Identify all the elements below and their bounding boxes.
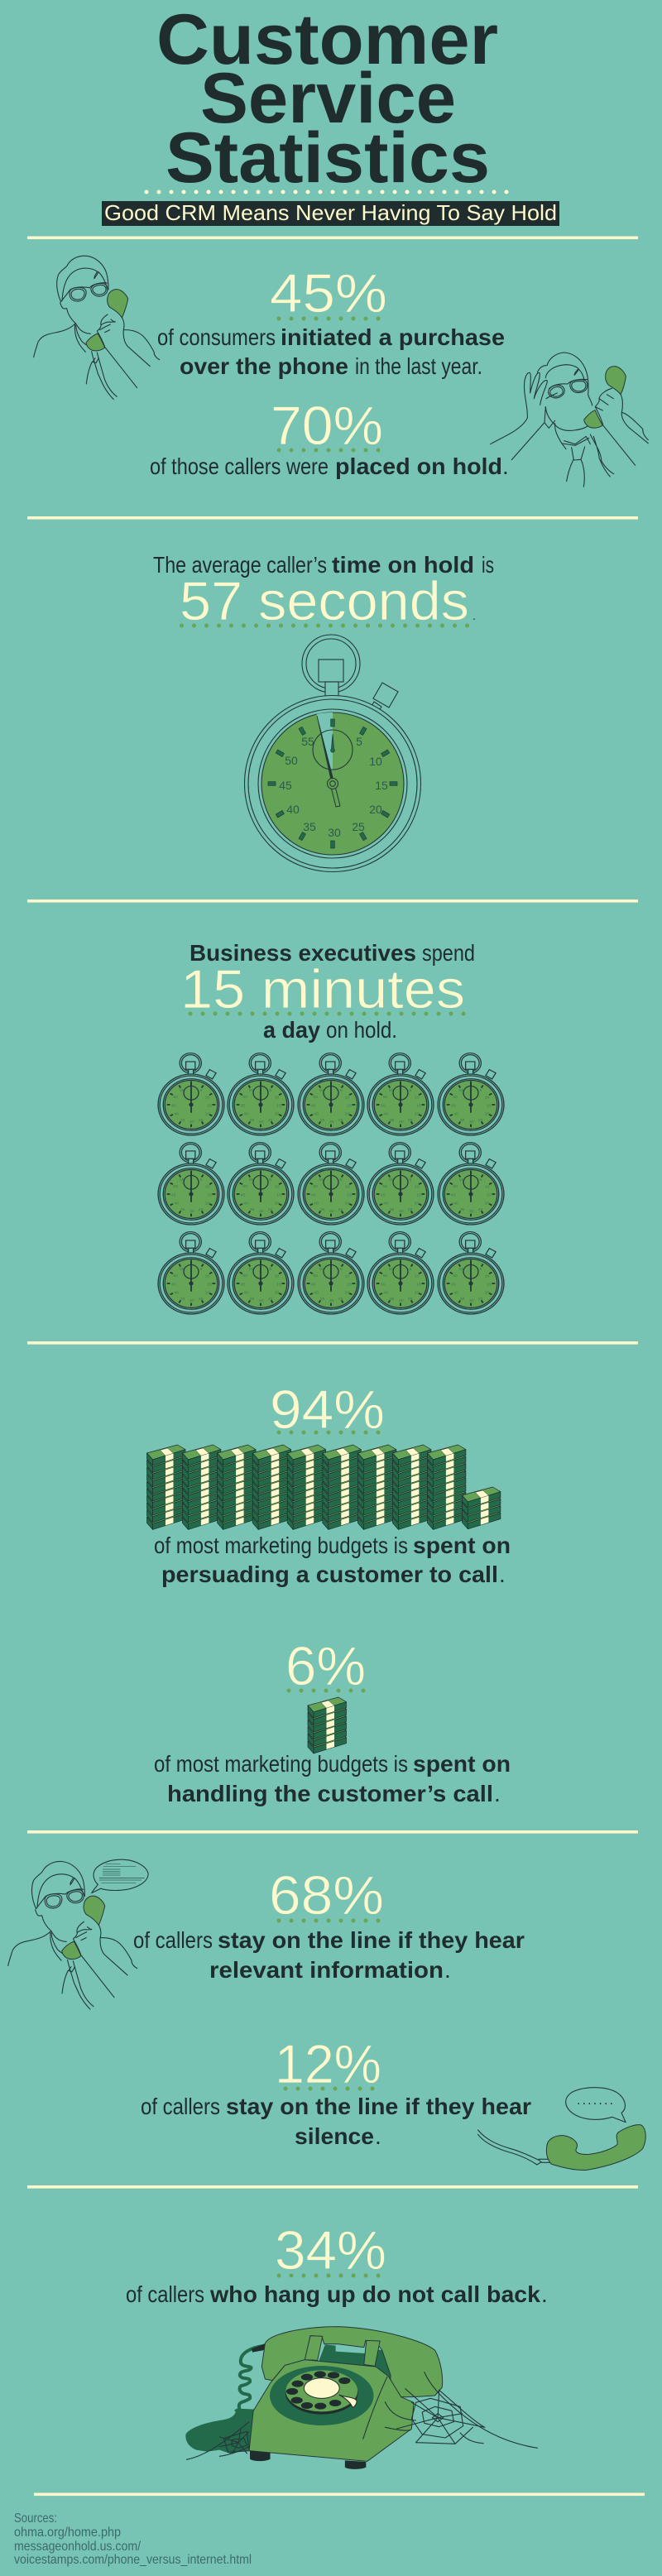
text: spent on handling (154, 1751, 511, 1806)
text: spent on handling: . (494, 1781, 501, 1806)
text: who hang up: who hang up do not call back (209, 2281, 540, 2307)
text: initiated a purchase: over the phone (180, 353, 348, 379)
text: initiated a purchase: in the last year. (355, 353, 482, 379)
text: silence: . (375, 2123, 381, 2149)
text: placed on hold: of those callers were (150, 453, 329, 479)
handset (261, 2327, 443, 2397)
stat: 57 seconds: 57 seconds (180, 570, 469, 631)
text: silence: silence (295, 2123, 374, 2149)
dial numbers: 50 (285, 754, 298, 767)
panel: marketing budgets (147, 1379, 511, 1806)
text: relevant information: . (444, 1957, 451, 1983)
text: who hang up: . (541, 2281, 548, 2307)
text: who hang up: of callers (126, 2281, 204, 2307)
stat: 70%: 70% (271, 395, 383, 456)
dial numbers: 5 (356, 735, 362, 748)
text: average caller's time on hold (153, 552, 494, 578)
dial numbers: 55 (301, 735, 314, 748)
dial numbers: 10 (369, 755, 382, 768)
text: relevant information (133, 1927, 525, 1983)
text: business executives spend: Business executives (189, 940, 416, 966)
text: spent on persuading: persuading a customer to call (161, 1561, 498, 1587)
sources: ohma.org/home.php (14, 2526, 121, 2540)
dial numbers: 45 (279, 779, 292, 792)
dial numbers: 35 (303, 820, 316, 833)
cobweb right (385, 2372, 537, 2448)
text: initiated a purchase (157, 324, 505, 379)
stat: 94%: 94% (270, 1379, 385, 1440)
text: relevant information: relevant information (209, 1957, 444, 1983)
text: placed on hold: placed on hold (335, 453, 502, 479)
text: relevant information: of callers (133, 1927, 213, 1953)
text: spent on persuading: spent on (413, 1533, 511, 1558)
feet (250, 2451, 271, 2461)
text: silence: stay on the line if they hear (226, 2094, 531, 2119)
icon: stopwatch at 57 seconds (245, 635, 420, 872)
text: spent on handling: of most marketing budgets is (154, 1751, 408, 1777)
panel: business executives (158, 940, 504, 1314)
text: initiated a purchase: of consumers (157, 324, 276, 350)
second hand (317, 716, 334, 784)
dial numbers: 15 (375, 779, 388, 792)
icon: man on phone (34, 256, 160, 400)
text: average caller's time on hold: time on hold (332, 552, 474, 578)
text: spent on handling: handling the customer’s call (167, 1781, 493, 1806)
stat: 68%: 68% (269, 1864, 384, 1926)
tick marks (268, 719, 397, 848)
title (156, 0, 498, 198)
stat: 12%: 12% (275, 2033, 381, 2094)
sources: messageonhold.us.com/ (14, 2540, 141, 2554)
icon: rotary telephone with cobwebs (185, 2327, 537, 2469)
phone cord (236, 2346, 264, 2411)
panel: time on hold (153, 552, 494, 872)
stat: 34%: 34% (275, 2219, 386, 2281)
title: Service (200, 59, 456, 138)
dial numbers: 25 (352, 820, 365, 833)
chart: money stacks 94 percent (147, 1445, 501, 1529)
text: a day on hold: a day (263, 1017, 320, 1043)
text: initiated a purchase: initiated a purchase (281, 324, 505, 350)
sources: voicestamps.com/phone_versus_internet.html (14, 2553, 252, 2567)
text: spent on persuading (154, 1533, 511, 1587)
icon: silent handset with speech bubble (478, 2088, 645, 2170)
sources: Sources: (14, 2511, 57, 2526)
text: a day on hold (263, 1017, 397, 1043)
text: business executives spend: spend (422, 940, 475, 966)
base (249, 2360, 414, 2461)
text: average caller's time on hold: The average caller’s (153, 552, 327, 578)
dial numbers: 20 (369, 803, 382, 816)
dial numbers (279, 735, 388, 839)
text: spent on handling: spent on (413, 1751, 511, 1777)
text: placed on hold (150, 453, 509, 479)
text: spent on persuading: . (499, 1561, 506, 1587)
title: Statistics (166, 118, 490, 198)
panel: hang ups (126, 2219, 548, 2469)
icon: speech bubble with information (92, 1859, 148, 1893)
text: relevant information: stay on the line if they hear (218, 1927, 525, 1953)
icon: man listening on phone (8, 1861, 137, 2009)
text: placed on hold: . (502, 453, 509, 479)
dial numbers: 30 (328, 826, 341, 839)
rotary dial (270, 2366, 374, 2425)
panel: calls and holds (34, 256, 648, 487)
subtitle banner: Good CRM Means Never Having To Say Hold (104, 200, 557, 225)
dial numbers: 40 (286, 803, 300, 816)
text: silence: of callers (141, 2094, 220, 2119)
panel: staying on the line (8, 1859, 645, 2170)
text: a day on hold: on hold. (326, 1017, 397, 1043)
title dotted divider (146, 190, 509, 194)
icon: frustrated man on phone (491, 353, 648, 487)
elapsed wedge (316, 712, 333, 770)
panel: staying on the line: ....... (577, 2094, 613, 2108)
text: silence (141, 2094, 531, 2149)
text: spent on persuading: of most marketing budgets is (154, 1533, 408, 1558)
stat: 15 minutes: 15 minutes (180, 958, 465, 1019)
icon grid: 15 stopwatches (158, 1053, 504, 1314)
chart: money stack 6 percent (308, 1697, 346, 1753)
stat: 45%: 45% (270, 262, 387, 324)
cradle back (319, 2344, 391, 2383)
stat: 6%: 6% (285, 1635, 366, 1696)
panel: time on hold: . (473, 609, 476, 622)
cobweb left (187, 2422, 249, 2459)
sources (14, 2511, 252, 2567)
text: average caller's time on hold: is (482, 552, 494, 578)
title: Customer (156, 0, 498, 79)
